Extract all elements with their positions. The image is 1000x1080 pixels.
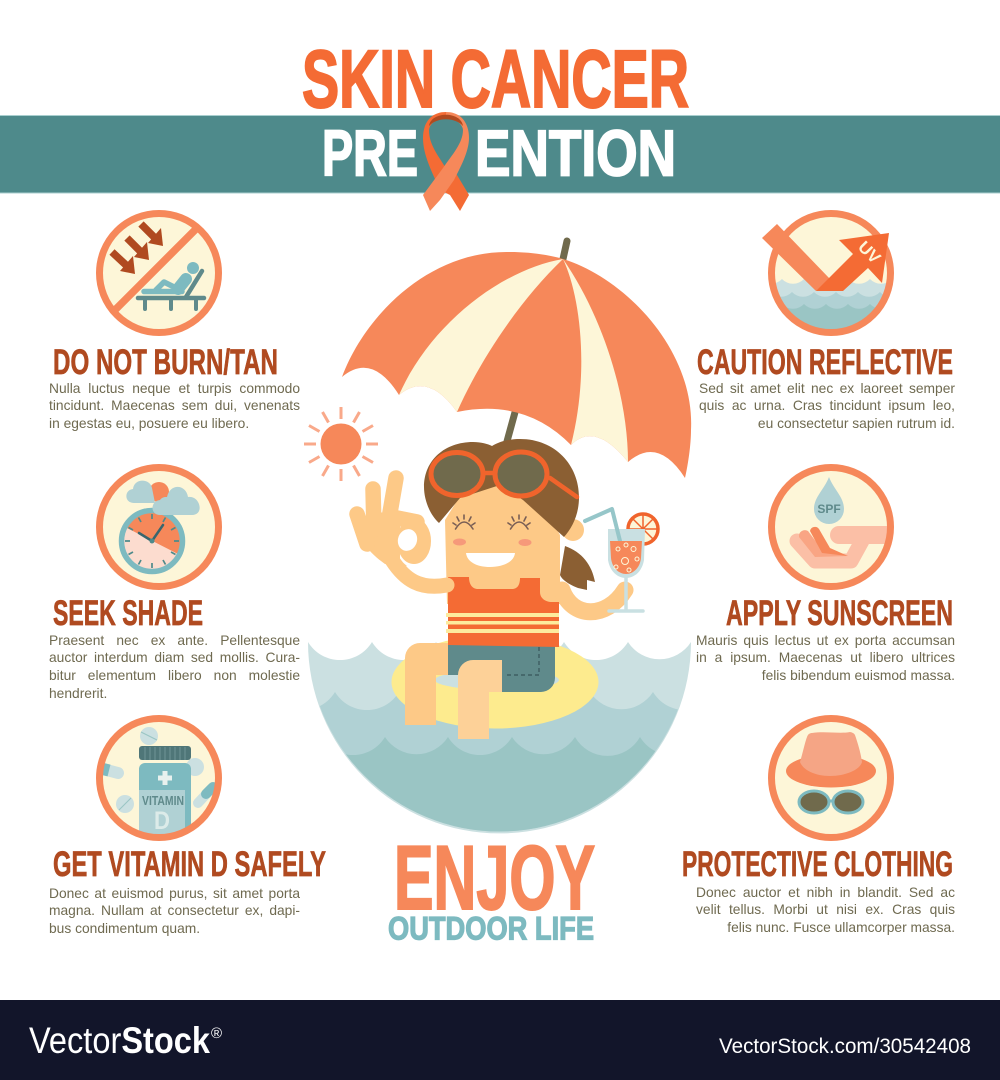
right leg <box>458 660 502 739</box>
text block: do not burn/tan <box>49 380 300 436</box>
shorts <box>448 640 555 692</box>
right arm <box>562 590 625 612</box>
icon: clock with clouds <box>100 468 218 586</box>
hair <box>424 439 579 537</box>
text block: get vitamin d safely: Donec at euismod purus, sit amet porta <box>49 886 300 901</box>
icon: no sunbathing <box>100 214 218 332</box>
illustration: girl on swim ring <box>351 439 658 739</box>
text block: do not burn/tan: in egestas eu, posuere eu libero. <box>49 416 249 431</box>
icon: vitamin d bottle: D <box>154 807 170 835</box>
sunglasses <box>431 452 577 497</box>
text block: protective clothing: velit tellus. Morbi ut nisi ex. Cras quis <box>696 902 955 917</box>
text block: seek shade <box>49 632 300 706</box>
text block: protective clothing <box>696 884 955 940</box>
icon: reflected uv arrow: UV <box>854 237 885 268</box>
banner text: prevention: ENTION <box>475 116 676 190</box>
panel: caution reflective <box>697 214 955 436</box>
icon: sun <box>304 407 378 481</box>
ponytail <box>560 546 595 590</box>
footer <box>0 1000 1000 1080</box>
icon: hat and sunglasses <box>772 718 890 838</box>
cocktail <box>585 509 658 611</box>
icon: vitamin d bottle: VITAMIN <box>142 793 184 808</box>
text block: apply sunscreen <box>696 632 955 688</box>
text block: seek shade: Praesent nec ex ante. Pellentesque <box>49 633 300 648</box>
illustration: beach umbrella <box>342 241 691 478</box>
text block: caution reflective <box>699 380 955 436</box>
banner text: prevention: PRE <box>322 116 418 190</box>
illustration: sea waves <box>308 642 691 834</box>
panel: get vitamin d safely <box>49 718 326 941</box>
text block: protective clothing: Donec auctor et nibh in blandit. Sed ac <box>696 885 955 900</box>
heading: outdoor life: OUTDOOR LIFE <box>388 910 594 946</box>
text block: protective clothing: felis nunc. Fusce ullamcorper massa. <box>727 920 955 935</box>
footer logo: VectorStock <box>29 1020 210 1061</box>
text block: get vitamin d safely: bus condimentum quam. <box>49 921 200 936</box>
icon: spf drop and hand <box>772 468 890 586</box>
text block: apply sunscreen: in a ipsum. Maecenas ut libero ultrices <box>696 650 955 665</box>
text block: seek shade: hendrerit. <box>49 686 107 701</box>
text block: caution reflective: quis ac urna. Cras tincidunt ipsum leo, <box>699 398 955 413</box>
text block: get vitamin d safely <box>49 885 300 941</box>
left arm and ok hand <box>351 478 447 586</box>
text block: seek shade: bitur elementum libero non molestie <box>49 668 300 683</box>
banner <box>0 115 1000 194</box>
text block: caution reflective: eu consectetur sapien rutrum id. <box>758 416 955 431</box>
text block: apply sunscreen: felis bibendum euismod massa. <box>762 668 955 683</box>
striped top <box>446 577 559 647</box>
panel: protective clothing <box>682 718 955 940</box>
face details <box>453 515 532 567</box>
icon: reflected uv arrow <box>762 210 894 336</box>
text block: do not burn/tan: Nulla luctus neque et turpis commodo <box>49 381 300 396</box>
icon: awareness ribbon <box>423 112 469 211</box>
panel: seek shade <box>49 468 300 706</box>
face and torso <box>445 480 560 604</box>
text block: seek shade: auctor interdum diam sed mollis. Cura- <box>49 650 300 665</box>
heading: do not burn/tan: DO NOT BURN/TAN <box>53 343 278 382</box>
panel: do not burn or tan <box>49 214 300 436</box>
heading: enjoy: ENJOY <box>394 828 595 929</box>
text block: caution reflective: Sed sit amet elit nec ex laoreet semper <box>699 381 955 396</box>
panel: apply sunscreen <box>696 468 955 688</box>
footer registered mark: ® <box>211 1025 222 1042</box>
title: skin cancer: SKIN CANCER <box>302 34 689 125</box>
text block: do not burn/tan: tincidunt. Maecenas sem dui, venenats <box>49 398 300 413</box>
swim ring <box>392 636 598 728</box>
heading: seek shade: SEEK SHADE <box>53 594 203 633</box>
left leg <box>405 643 448 725</box>
text block: apply sunscreen: Mauris quis lectus ut ex porta accumsan <box>696 633 955 648</box>
text block: get vitamin d safely: magna. Nullam at consectetur ex, dapi- <box>49 903 300 918</box>
icon: vitamin d bottle <box>100 718 218 843</box>
icon: spf drop and hand: SPF <box>817 502 841 516</box>
ear <box>562 519 584 541</box>
heading: get vitamin d safely: GET VITAMIN D SAFELY <box>53 845 326 884</box>
footer image id: VectorStock.com/30542408 <box>719 1035 971 1058</box>
